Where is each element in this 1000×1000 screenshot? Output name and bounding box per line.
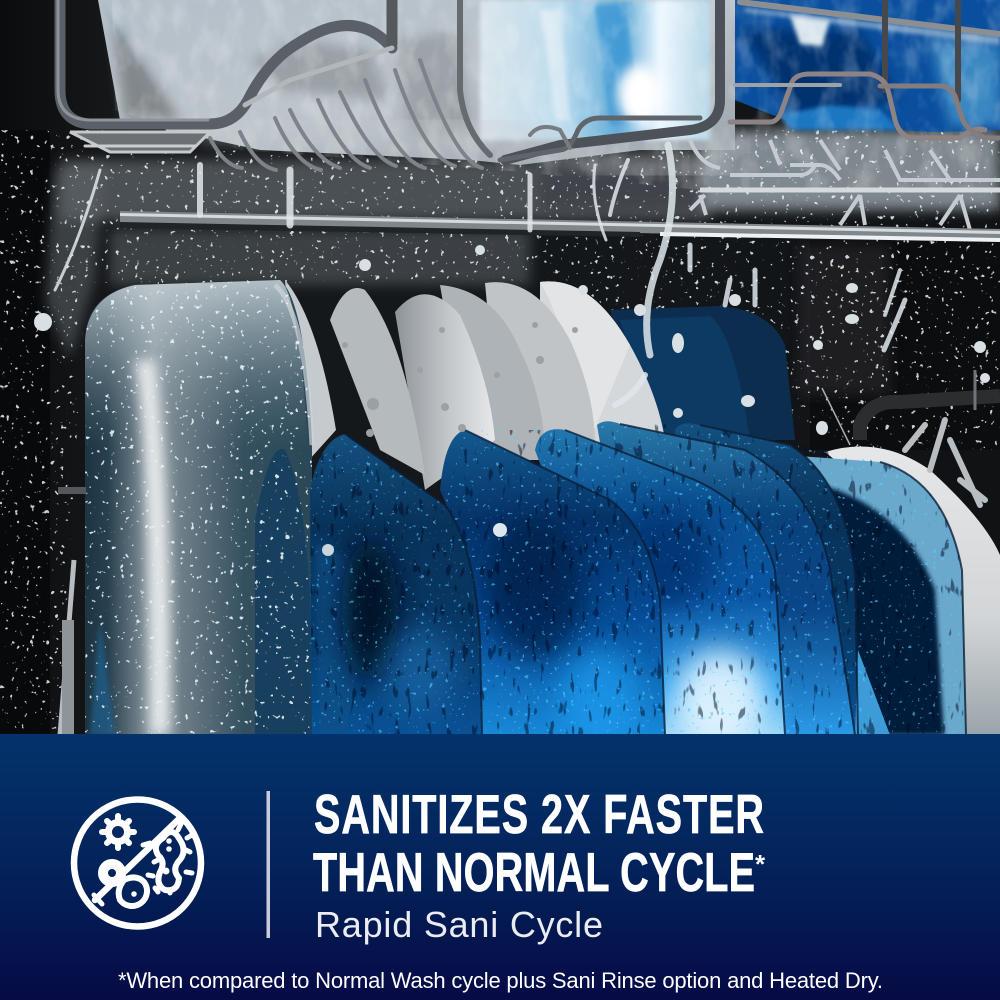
upper rack texture (112, 0, 1000, 190)
back blue dishes (610, 306, 795, 440)
blue glass dish 2 (535, 429, 785, 735)
horizontal rail (120, 211, 1000, 242)
glass bubbles texture (85, 280, 315, 735)
right plate (825, 446, 1000, 735)
upper rack glassware: left tumbler (98, 0, 735, 165)
spray haze behind racks (60, 160, 710, 220)
blue glass dish 3 (597, 421, 855, 735)
blue dish texture (300, 420, 970, 735)
headline: THAN NORMAL CYCLE (313, 843, 755, 904)
footnote: *When compared to Normal Wash cycle plus Sani Rinse option and Heated Dry. (118, 968, 883, 993)
tall glass (58, 280, 315, 735)
background droplet texture (0, 130, 1000, 735)
headline (313, 785, 766, 904)
subheading: Rapid Sani Cycle (315, 904, 603, 945)
photo background: dark tub (0, 0, 1000, 735)
blue glass dish 1 (440, 430, 665, 735)
white plates (285, 280, 665, 490)
blue glass dish 5 (rear right) (745, 452, 966, 735)
bottom banner panel (0, 734, 1000, 1000)
divider (266, 791, 270, 938)
icon: lower-left germ (103, 864, 147, 906)
blue glass dish 0 (front left) (310, 434, 482, 735)
icon: no germs (74, 800, 201, 926)
blue glass dish 4 (675, 423, 858, 735)
asterisk: * (755, 849, 766, 879)
dark rack piece at right (822, 370, 1000, 505)
icon ring (74, 800, 201, 926)
headline: SANITIZES 2X FASTER (314, 785, 764, 846)
upper rack glassware: bright right tumbler (480, 0, 710, 140)
photo: dishwasher interior (0, 0, 1000, 750)
upper rack: blue glass at right (735, 0, 1000, 132)
rack wires: comb tines (58, 0, 1000, 170)
icon: gear germ (102, 816, 134, 848)
main rack wire (60, 0, 392, 124)
icon: right rod germ (143, 824, 192, 893)
water droplets (34, 245, 990, 435)
icon: slash line (95, 818, 180, 900)
lower rack wires area (690, 140, 1000, 230)
water streams (55, 145, 905, 405)
